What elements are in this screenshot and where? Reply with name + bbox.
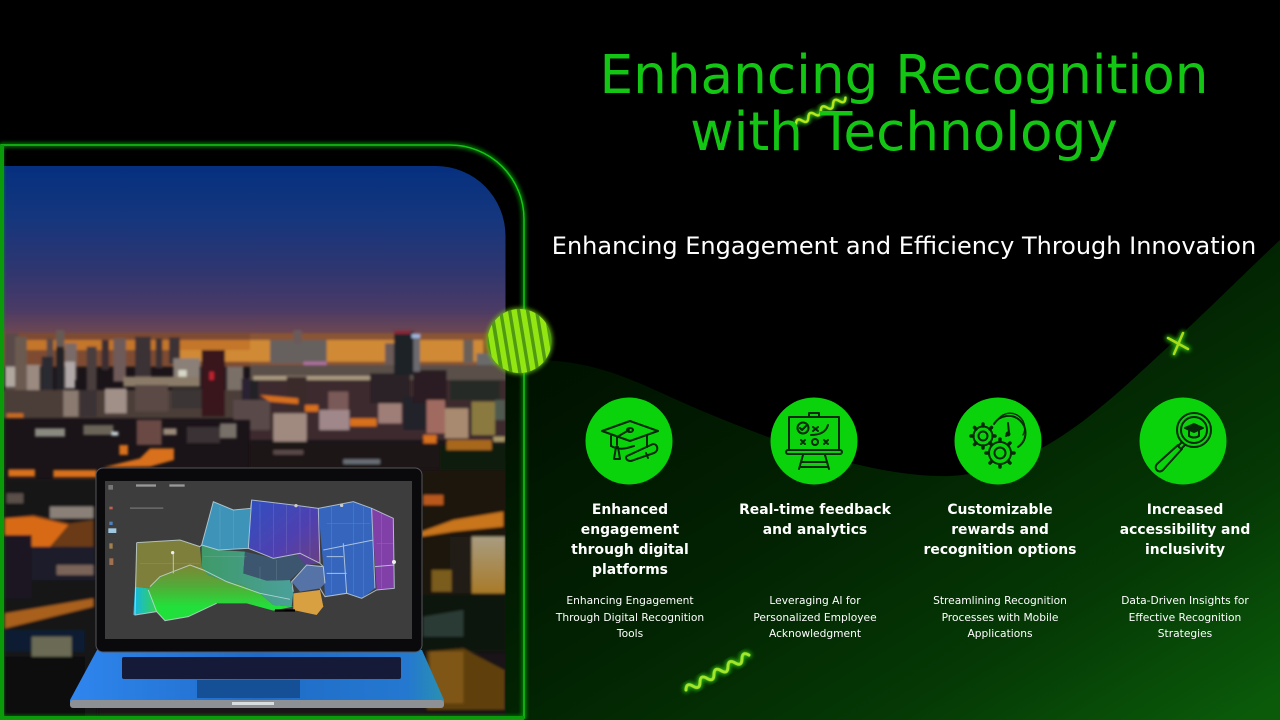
column heading: and analytics <box>763 522 867 538</box>
laptop lid <box>96 468 422 652</box>
column: digital platforms <box>556 502 704 640</box>
column description <box>933 594 1067 640</box>
column description: Tools <box>617 627 643 640</box>
keyboard <box>122 657 401 679</box>
column description <box>556 594 704 640</box>
column description: Through Digital Recognition <box>556 610 704 624</box>
icon: strategy board <box>770 398 858 484</box>
title <box>600 44 1208 163</box>
squiggle: title accent <box>795 95 847 127</box>
icon: graduation cap <box>586 398 672 484</box>
column heading: rewards and <box>951 522 1049 538</box>
column description: Processes with Mobile <box>942 610 1058 624</box>
column description: Strategies <box>1158 627 1212 640</box>
right skyline <box>250 330 510 480</box>
column heading: recognition options <box>924 542 1076 558</box>
squiggle: bottom accent <box>684 652 751 693</box>
city photo <box>0 166 510 720</box>
column heading <box>571 502 689 578</box>
title: Enhancing Recognition <box>600 44 1208 106</box>
app sidebar <box>108 484 185 565</box>
column heading: through digital <box>571 542 689 558</box>
map <box>108 484 396 621</box>
column: feedback and analytics <box>739 502 892 640</box>
column description <box>1121 594 1249 640</box>
column heading: Enhanced <box>592 502 668 518</box>
column description: Acknowledgment <box>769 627 861 640</box>
icon: gears and gauge <box>954 398 1042 484</box>
laptop base <box>70 650 444 702</box>
subtitle: Enhancing Engagement and Efficiency Through Innovation <box>552 232 1256 260</box>
column description: Personalized Employee <box>753 610 877 624</box>
column heading: inclusivity <box>1145 542 1225 558</box>
laptop <box>70 468 444 708</box>
panel: city photo with laptop <box>0 145 524 720</box>
right lower district <box>420 470 507 710</box>
background wave <box>500 240 1280 720</box>
column heading: engagement <box>581 522 679 538</box>
icon: magnifier with cap <box>1140 398 1226 484</box>
glowing frame <box>0 145 524 720</box>
left lower district <box>0 480 97 720</box>
title: with Technology <box>690 101 1118 163</box>
column heading: platforms <box>592 562 668 578</box>
column description: Applications <box>967 627 1033 640</box>
column: rewards options <box>924 502 1076 640</box>
column heading <box>739 502 892 538</box>
left skyline <box>0 330 260 477</box>
column description: Leveraging AI for <box>769 594 861 607</box>
column heading: Increased <box>1147 502 1223 518</box>
column heading <box>1120 502 1250 558</box>
striped ball <box>484 304 556 378</box>
column heading <box>924 502 1076 558</box>
column description: Enhancing Engagement <box>566 594 694 607</box>
column: accessibility <box>1120 502 1250 640</box>
column heading: Customizable <box>947 502 1053 518</box>
column description: Streamlining Recognition <box>933 594 1067 607</box>
icon: cross accent <box>1168 333 1188 354</box>
column description <box>753 594 877 640</box>
trackpad <box>197 680 300 698</box>
column description: Data-Driven Insights for <box>1121 594 1249 607</box>
laptop screen <box>105 481 412 639</box>
column heading: accessibility and <box>1120 522 1250 538</box>
column heading: Real-time feedback <box>739 502 891 518</box>
column description: Effective Recognition <box>1129 610 1241 624</box>
